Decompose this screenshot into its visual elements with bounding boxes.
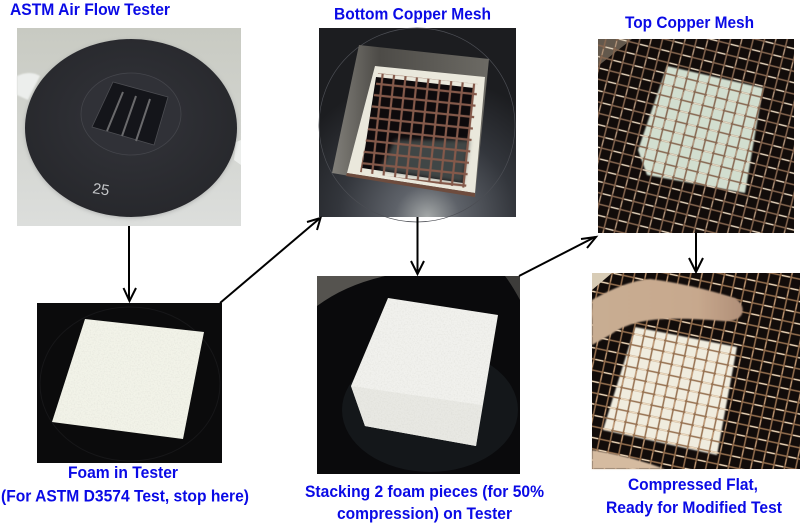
arrow: stacked foam to top mesh (519, 237, 596, 276)
metal tray (332, 45, 489, 197)
caption: foam in tester: (For ASTM D3574 Test, stop here) (1, 488, 249, 506)
heading: Bottom Copper Mesh: Bottom Copper Mesh (334, 6, 491, 24)
photo: bottom copper mesh in tester (319, 28, 516, 222)
label: number 25 on disc: 25 (91, 180, 111, 200)
caption: foam in tester: Foam in Tester (68, 464, 179, 482)
caption: compressed flat: Compressed Flat, (628, 476, 758, 494)
arrow: top mesh to compressed (689, 233, 703, 272)
hand: thumb at bottom (592, 450, 665, 469)
arrow: tester to foam (124, 226, 136, 301)
heading: ASTM Air Flow Tester: ASTM Air Flow Tester (10, 1, 171, 19)
arrow: foam to bottom mesh (220, 218, 320, 303)
caption: stacking foam: compression) on Tester (337, 505, 513, 523)
dark opening with copper mesh (360, 73, 478, 188)
photo: foam in tester (37, 303, 222, 463)
hand: finger (592, 279, 743, 345)
caption: stacking foam (305, 483, 544, 523)
photo: ASTM air flow tester disc (17, 28, 241, 226)
photo: top copper mesh over foam (598, 39, 794, 233)
heading: Top Copper Mesh: Top Copper Mesh (625, 14, 754, 32)
photo: stacking two foam pieces on tester (317, 276, 520, 474)
caption: compressed flat: Ready for Modified Test (606, 499, 782, 517)
caption: stacking foam: Stacking 2 foam pieces (for 50% (305, 483, 544, 501)
photo: finger compressing mesh flat (592, 273, 800, 469)
caption: foam in tester (1, 464, 249, 506)
caption: compressed flat (606, 476, 782, 517)
arrow: bottom mesh to stacked foam (411, 217, 424, 274)
